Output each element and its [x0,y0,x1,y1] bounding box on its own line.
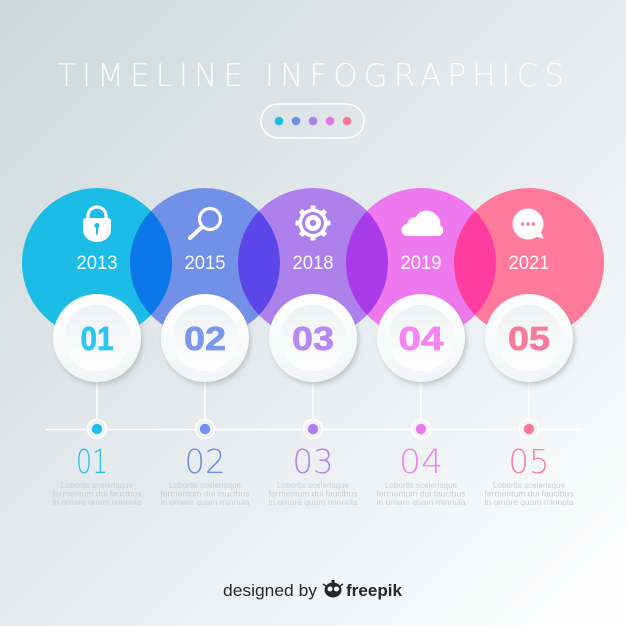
title: TIMELINE INFOGRAPHICS [57,58,564,94]
step 03 text: Lobortis scelerisque [277,480,349,490]
step 02 text [160,442,250,507]
icon: cloud [401,211,443,236]
year labels: 2018 [292,252,334,274]
number badge 04: 04 [398,320,444,357]
timeline node 04 [412,420,430,438]
step 01 text: 01 [76,442,108,481]
footer credit [223,580,403,600]
step 04 text: Lobortis scelerisque [385,480,457,490]
step 05 text [484,442,574,507]
number badge 05: 05 [508,320,550,357]
step 03 text: fermentum dui faucibus [268,488,358,498]
number badge 03: 03 [292,320,334,357]
step 04 text [376,442,466,507]
step 04 text: in ornare quam minnula [376,497,466,507]
year labels: 2015 [184,252,226,274]
step 05 text: fermentum dui faucibus [484,488,574,498]
step 01 text: fermentum dui faucibus [52,488,142,498]
number badge 02: 02 [184,320,226,357]
step 03 text: 03 [292,442,334,481]
timeline node 03 [304,420,322,438]
timeline axis [46,380,580,430]
year labels: 2019 [400,252,442,274]
number badge 04 [377,294,465,382]
step 05 text: Lobortis scelerisque [493,480,565,490]
year labels: 2021 [508,252,550,274]
step 04 text: 04 [399,442,443,481]
step 02 text: 02 [184,442,226,481]
step 02 text: in ornare quam minnula [160,497,250,507]
step 01 text: Lobortis scelerisque [61,480,133,490]
timeline node 01 [88,420,106,438]
step 03 text [268,442,358,507]
icon: freepik bee [323,580,343,598]
number badge 01 [53,294,141,382]
step 02 text: Lobortis scelerisque [169,480,241,490]
overlapping year circles [22,188,604,338]
step 05 text: in ornare quam minnula [484,497,574,507]
number badge 01: 01 [80,320,114,357]
step 01 text: in ornare quam minnula [52,497,142,507]
timeline node 05 [520,420,538,438]
step 01 text [52,442,142,507]
icon: magnifying glass [190,208,220,238]
icon: speech bubble [512,208,544,240]
year labels [76,252,550,274]
number badge 02 [161,294,249,382]
footer credit: freepik [346,581,403,600]
step 04 text: fermentum dui faucibus [376,488,466,498]
step 05 text: 05 [508,442,550,481]
footer credit: designed by [223,582,318,600]
number badge 05 [485,294,573,382]
icon: padlock [83,207,111,242]
pill with five colour dots [261,104,364,138]
number badge 03 [269,294,357,382]
year labels: 2013 [76,252,118,274]
step 03 text: in ornare quam minnula [268,497,358,507]
timeline node 02 [196,420,214,438]
icon: gear [296,206,330,240]
step 02 text: fermentum dui faucibus [160,488,250,498]
